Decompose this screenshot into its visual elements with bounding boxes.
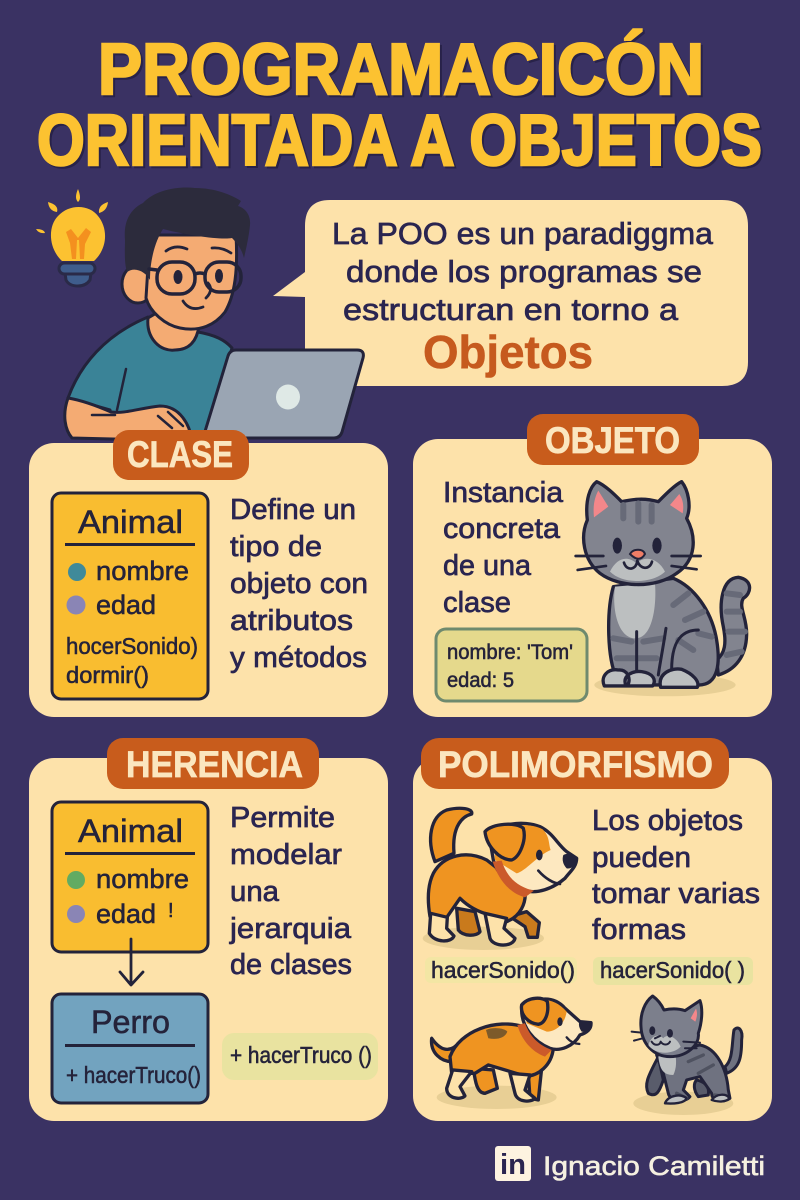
- method highlight: + hacerTruco (): [230, 1042, 372, 1068]
- laptop: [203, 350, 363, 438]
- class diagram: animal: Animal: [78, 813, 183, 849]
- object values box: nombre: 'Tom': [447, 641, 573, 664]
- bubble text: [332, 216, 714, 327]
- text: clase description: y métodos: [230, 642, 367, 674]
- text: clase description: atributos: [230, 605, 353, 637]
- text: polimorfismo description: Los objetos: [592, 805, 743, 837]
- illustration: walking cat: [632, 996, 742, 1115]
- text: clase description: Define un: [230, 494, 356, 526]
- class diagram: perro: + hacerTruco(): [66, 1062, 201, 1088]
- class diagram: animal: hocerSonido): [66, 633, 198, 659]
- class diagram: perro: [52, 994, 208, 1103]
- badge: herencia: HERENCIA: [126, 744, 303, 785]
- badge: polimorfismo: POLIMORFISMO: [438, 744, 713, 785]
- text: herencia description: Permite: [230, 802, 335, 834]
- eyes and mouth: [174, 270, 182, 284]
- illustration: cat: [576, 482, 750, 696]
- text: clase description: [230, 494, 368, 674]
- ear: [122, 265, 154, 303]
- text: polimorfismo description: formas: [592, 914, 686, 946]
- badge: clase: CLASE: [127, 434, 233, 475]
- method highlight: [222, 1033, 378, 1080]
- class diagram: animal: edad: [96, 590, 156, 620]
- arrow: inheritance: [120, 939, 143, 985]
- arm: [65, 398, 192, 441]
- object values box: edad: 5: [447, 669, 514, 692]
- class diagram: animal: nombre: [96, 556, 189, 586]
- text: clase description: tipo de: [230, 531, 322, 563]
- method label: cat: hacerSonido( ): [600, 957, 745, 983]
- hair: [125, 188, 250, 280]
- text: objeto description: Instancia: [443, 477, 564, 509]
- badge: objeto: OBJETO: [545, 420, 680, 461]
- text: polimorfismo description: [592, 805, 760, 946]
- bubble text: donde los programas se: [346, 254, 702, 289]
- icon: linkedin: [495, 1146, 531, 1181]
- class diagram: animal: dormir(): [66, 662, 149, 688]
- text: herencia description: de clases: [230, 949, 352, 981]
- illustration: walking dog: [423, 808, 577, 950]
- illustration: standing dog: [432, 998, 591, 1109]
- icon: linkedin: in: [500, 1149, 526, 1181]
- class diagram: animal: !: [168, 900, 174, 922]
- text: clase description: objeto con: [230, 568, 368, 600]
- footer: author credit: Ignacio Camiletti: [543, 1151, 765, 1181]
- title: PROGRAMACICÓN: [98, 29, 704, 110]
- icon: lightbulb: [36, 189, 108, 286]
- bubble text: La POO es un paradiggma: [332, 216, 714, 251]
- text: objeto description: de una: [443, 550, 532, 582]
- class diagram: animal: nombre: [96, 864, 189, 894]
- neck: [148, 305, 199, 350]
- class diagram: animal: Animal: [78, 504, 183, 540]
- glasses: [149, 262, 241, 294]
- text: polimorfismo description: tomar varias: [592, 878, 760, 910]
- text: herencia description: [229, 802, 352, 981]
- class diagram: perro: Perro: [91, 1004, 170, 1040]
- character with laptop: [65, 188, 363, 441]
- highlighted word: Objetos: [423, 326, 593, 378]
- text: objeto description: concreta: [443, 513, 561, 545]
- text: polimorfismo description: pueden: [592, 842, 691, 874]
- method label: dog: hacerSonido(): [431, 957, 575, 983]
- panel: herencia: [29, 738, 388, 1121]
- face: [146, 235, 237, 329]
- text: herencia description: jerarquia: [229, 913, 352, 945]
- panel: clase: [29, 430, 388, 717]
- title: [37, 29, 764, 183]
- footer: author credit: [495, 1146, 765, 1181]
- object values box: [436, 629, 587, 701]
- text: objeto description: [443, 477, 564, 619]
- speech bubble: [273, 200, 748, 386]
- bubble text: estructuran en torno a: [343, 292, 679, 327]
- class diagram: animal: [52, 802, 208, 952]
- panel: objeto: [413, 414, 772, 717]
- text: herencia description: una: [230, 876, 280, 908]
- class diagram: animal: [52, 493, 208, 699]
- title: PROGRAMACICÓN: [100, 31, 706, 112]
- panel: polimorfismo: [413, 738, 772, 1121]
- text: herencia description: modelar: [230, 839, 342, 871]
- text: objeto description: clase: [443, 587, 511, 619]
- class diagram: animal: edad: [96, 899, 156, 929]
- torso: [68, 317, 232, 440]
